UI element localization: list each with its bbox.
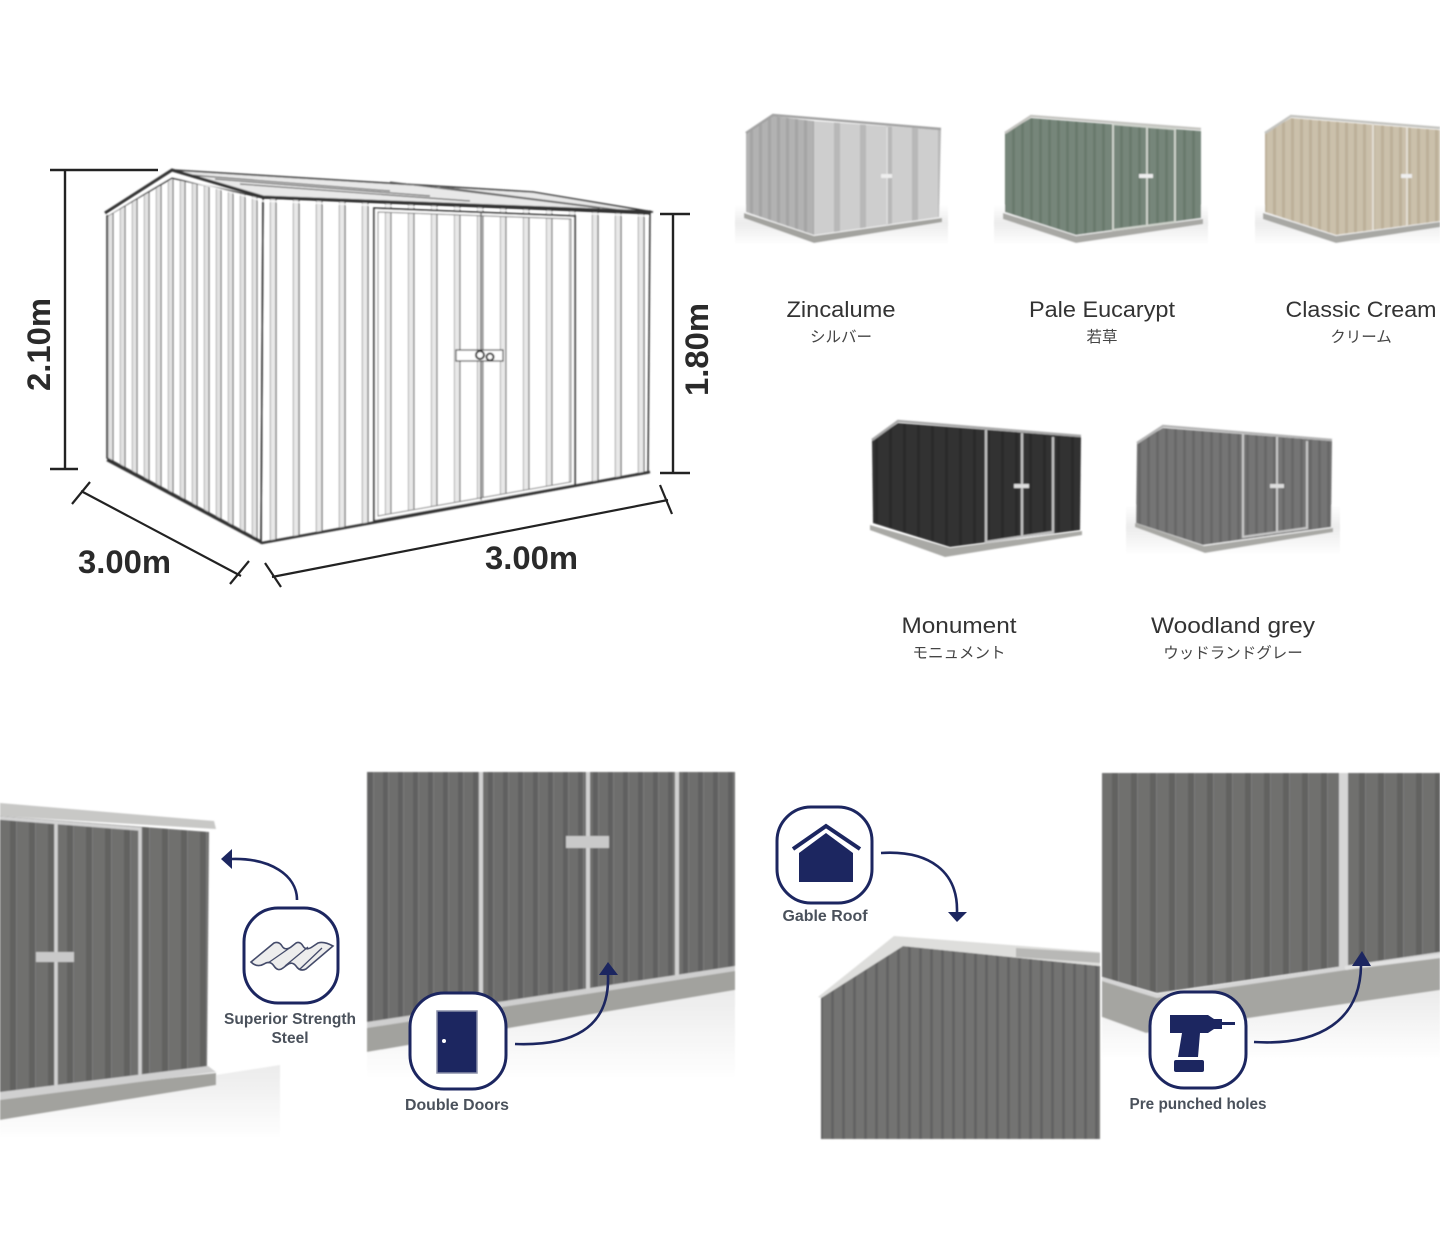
- panel: gable roof: [777, 807, 1100, 1139]
- shed: Classic Cream: [1255, 116, 1440, 245]
- shed: Pale Eucarypt: [994, 116, 1208, 245]
- panel: colour option Woodland grey: [1126, 426, 1340, 662]
- icon: corrugated steel: [244, 908, 338, 1003]
- shed: Monument: [870, 421, 1082, 557]
- dimension: 1.80m height: 1.80m: [679, 303, 715, 396]
- shed: Woodland grey: [1126, 426, 1340, 555]
- label: Pale Eucarypt: 若草: [1086, 328, 1118, 346]
- icon: door: [410, 993, 506, 1089]
- label: Classic Cream: [1286, 297, 1436, 346]
- label: Gable Roof: Gable Roof: [782, 908, 868, 925]
- panel: colour option Zincalume: [735, 115, 948, 346]
- label: Monument: [902, 613, 1016, 662]
- panel: colour option Classic Cream: [1255, 116, 1440, 346]
- panel: colour option Pale Eucarypt: [994, 116, 1208, 346]
- label: Monument: モニュメント: [912, 645, 1006, 662]
- photo: gable wall: [818, 936, 1100, 1139]
- label: Pale Eucarypt: Pale Eucarypt: [1029, 297, 1175, 322]
- dimension: 3.00m width: [265, 485, 672, 587]
- label: Zincalume: Zincalume: [786, 297, 896, 322]
- icon: drill: [1150, 992, 1246, 1088]
- dimension: 2.10m height: [21, 170, 158, 469]
- label: Pre punched holes: Pre punched holes: [1130, 1096, 1266, 1113]
- label: Pale Eucarypt: [1029, 297, 1175, 346]
- label: Woodland grey: [1151, 613, 1315, 662]
- dimension: 1.80m height: [660, 214, 715, 473]
- label: Classic Cream: クリーム: [1330, 328, 1392, 346]
- panel: line drawing of shed with dimensions: [21, 170, 715, 587]
- arrow: [221, 849, 297, 900]
- photo: shed doors: [367, 772, 735, 1080]
- label: Classic Cream: Classic Cream: [1286, 297, 1436, 322]
- icon: house: [777, 807, 872, 903]
- label: Zincalume: [786, 297, 896, 346]
- label: Zincalume: シルバー: [810, 329, 872, 346]
- label: Superior Strength Steel: Steel: [271, 1030, 309, 1047]
- arrow: [1254, 951, 1371, 1042]
- label: Double Doors: Double Doors: [405, 1097, 509, 1114]
- photo: shed side: [0, 803, 280, 1140]
- panel: double doors: [367, 772, 735, 1114]
- photo: shed corner: [1102, 773, 1440, 1060]
- dimension: 2.10m height: 2.10m: [21, 298, 57, 391]
- label: Woodland grey: ウッドランドグレー: [1163, 644, 1303, 662]
- panel: superior strength steel: [0, 803, 356, 1140]
- panel: pre punched holes: [1102, 773, 1440, 1113]
- dimension: 3.00m depth: [72, 482, 249, 584]
- shed line drawing: [105, 170, 653, 543]
- dimension: 3.00m depth: 3.00m: [78, 544, 171, 580]
- label: Superior Strength Steel: Superior Strength: [224, 1011, 356, 1028]
- panel: colour option Monument: [870, 421, 1082, 662]
- shed: Zincalume: [735, 115, 948, 245]
- label: Monument: Monument: [902, 613, 1016, 638]
- arrow: [515, 962, 618, 1044]
- label: Woodland grey: Woodland grey: [1151, 613, 1315, 638]
- label: Superior Strength Steel: [224, 1011, 356, 1047]
- arrow: [881, 853, 967, 922]
- dimension: 3.00m width: 3.00m: [485, 540, 578, 576]
